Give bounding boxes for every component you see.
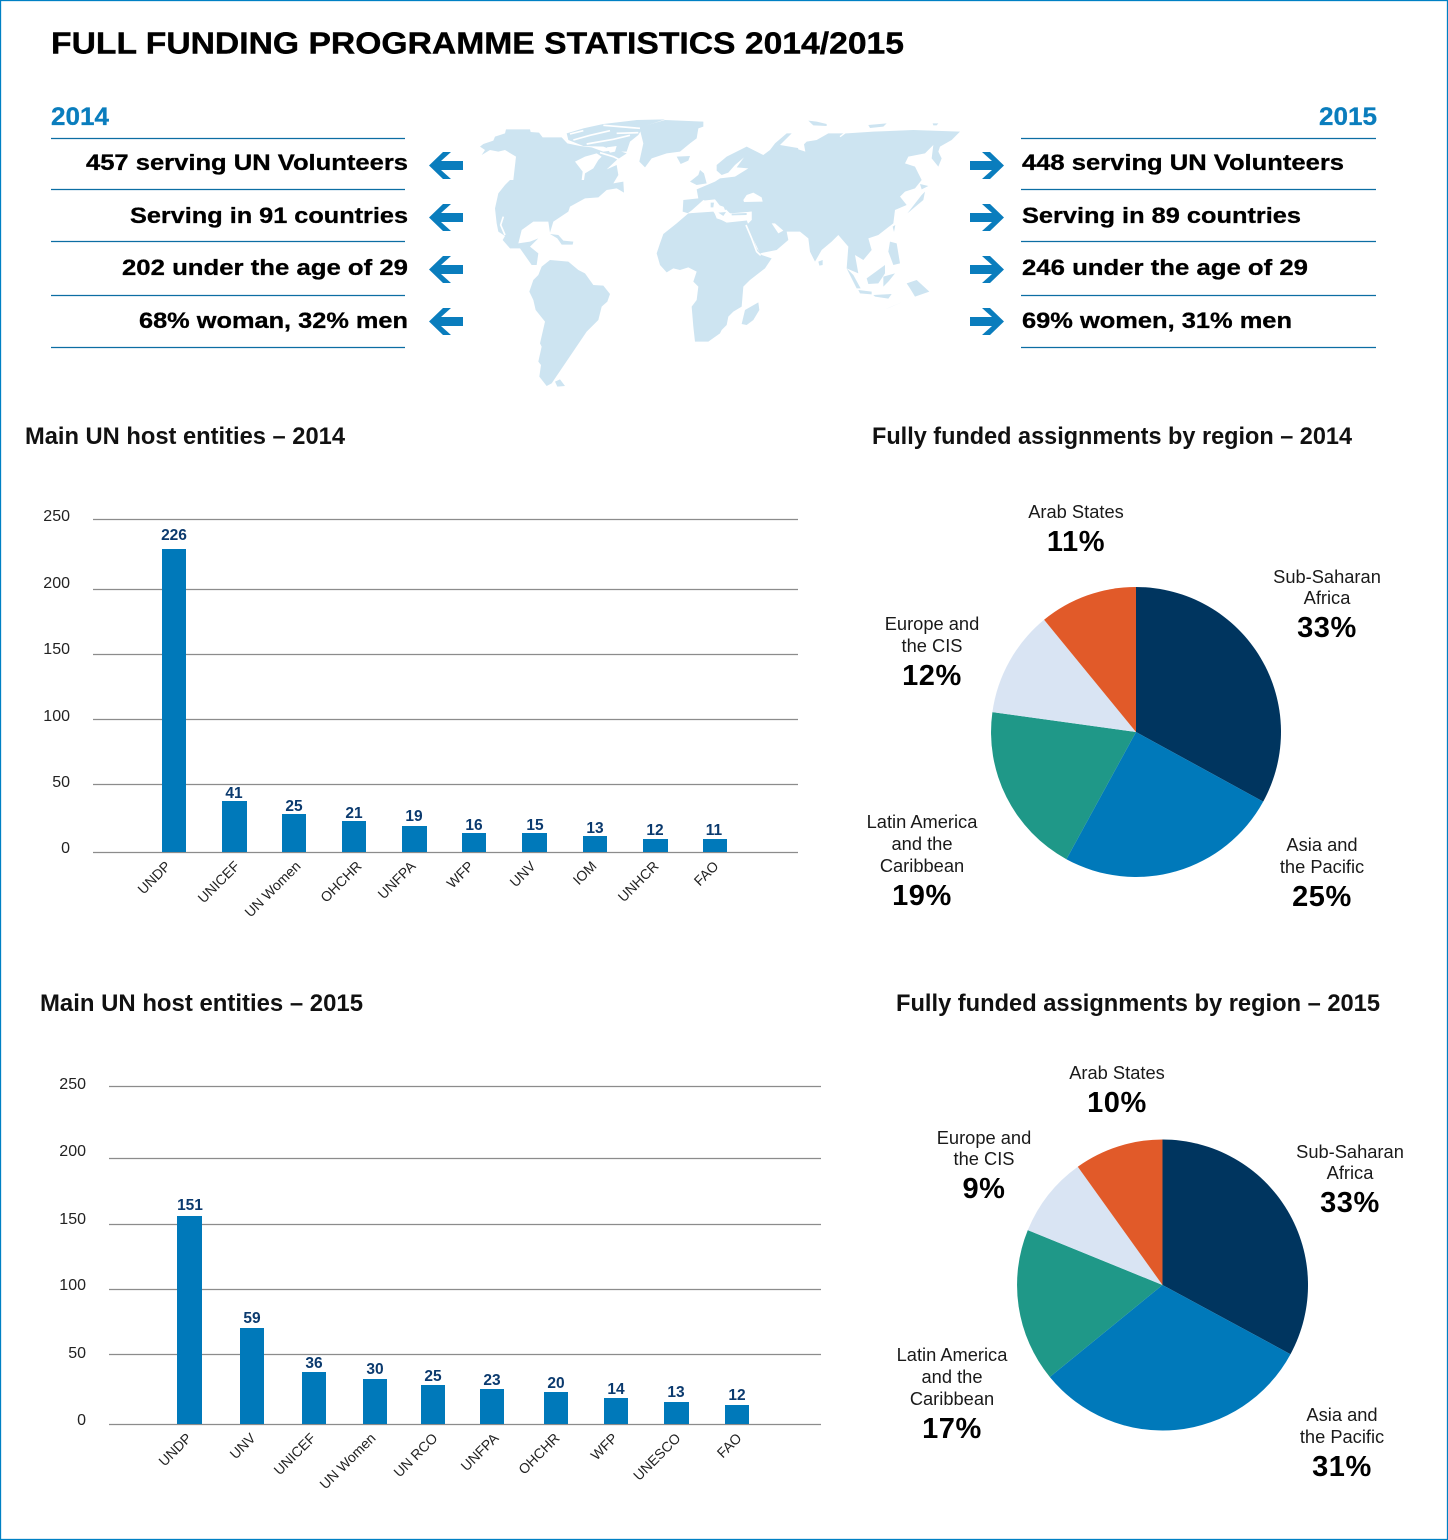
stat rows 2014: Serving in 91 countries <box>130 203 408 228</box>
y axis labels: 150 <box>59 1211 86 1228</box>
label: Arab States: 10% <box>1087 1087 1147 1119</box>
label: Arab States: Arab States <box>1069 1062 1165 1083</box>
value labels: 21 <box>345 805 363 822</box>
value labels: 11 <box>706 822 723 839</box>
category labels: OHCHR <box>317 858 365 905</box>
category labels: WFP <box>587 1430 621 1463</box>
label: Asia and the Pacific: 31% <box>1312 1451 1372 1483</box>
bars <box>162 549 727 852</box>
label: Arab States <box>1028 501 1124 558</box>
label: Latin America and the Caribbean <box>867 811 978 912</box>
arrows pointing right <box>970 152 1004 335</box>
stat rows 2015: 448 serving UN Volunteers <box>1022 150 1344 175</box>
stat rows 2015 <box>1022 150 1344 333</box>
value labels <box>161 527 723 839</box>
title: FULL FUNDING PROGRAMME STATISTICS 2014/2015 <box>51 26 904 60</box>
y axis labels: 200 <box>43 575 70 592</box>
value labels: 226 <box>161 527 187 544</box>
category labels: WFP <box>443 858 477 891</box>
y axis labels: 150 <box>43 641 70 658</box>
stat rows 2014: 68% woman, 32% men <box>139 308 408 333</box>
value labels <box>177 1197 746 1404</box>
heading: 2014: 2014 <box>51 103 109 131</box>
pie slices <box>991 587 1281 877</box>
panel: 2014 key figures <box>51 103 463 348</box>
category labels: FAO <box>690 858 722 889</box>
category labels: UNFPA <box>374 857 419 902</box>
value labels: 41 <box>225 785 243 802</box>
bars <box>177 1216 749 1424</box>
stat rows 2014 <box>86 150 408 333</box>
value labels: 23 <box>483 1372 501 1389</box>
heading: 2015: 2015 <box>1319 103 1377 131</box>
category labels: UN Women <box>241 858 304 920</box>
label: Asia and the Pacific: the Pacific <box>1300 1426 1384 1447</box>
label: Latin America and the Caribbean <box>897 1344 1008 1445</box>
label: Latin America and the Caribbean: and the <box>922 1366 982 1387</box>
category labels: UNDP <box>134 858 174 897</box>
stat rows 2014: 202 under the age of 29 <box>122 255 408 280</box>
label: Sub-Saharan Africa: Africa <box>1304 587 1351 608</box>
panel: 2015 key figures <box>970 103 1377 348</box>
label: Latin America and the Caribbean: Latin America <box>867 811 978 832</box>
value labels: 16 <box>465 817 483 834</box>
category labels <box>155 1429 745 1492</box>
label: Arab States <box>1069 1062 1165 1119</box>
value labels: 19 <box>405 808 423 825</box>
heading: Main UN host entities – 2014 <box>25 423 346 450</box>
value labels: 20 <box>547 1375 565 1392</box>
category labels: OHCHR <box>515 1430 563 1477</box>
label: Europe and the CIS: Europe and <box>937 1127 1031 1148</box>
y axis labels <box>59 1076 86 1429</box>
label: Sub-Saharan Africa: Sub-Saharan <box>1296 1141 1404 1162</box>
y axis labels: 250 <box>43 508 70 525</box>
heading: Main UN host entities – 2015 <box>40 990 363 1017</box>
category labels: UN Women <box>316 1430 379 1492</box>
stat rows 2014: 457 serving UN Volunteers <box>86 150 408 175</box>
label: Latin America and the Caribbean: 19% <box>892 880 952 912</box>
value labels: 25 <box>424 1368 442 1385</box>
label: Europe and the CIS: 12% <box>902 660 962 692</box>
pie slices <box>1017 1140 1308 1430</box>
label: Europe and the CIS: Europe and <box>885 613 979 634</box>
stat rows 2015: 69% women, 31% men <box>1022 308 1292 333</box>
value labels: 13 <box>586 820 604 837</box>
value labels: 13 <box>667 1384 685 1401</box>
label: Europe and the CIS: the CIS <box>902 635 962 656</box>
value labels: 15 <box>526 817 544 834</box>
y axis labels: 0 <box>77 1412 86 1429</box>
label: Asia and the Pacific: 25% <box>1292 881 1352 913</box>
pie chart: assignments by region 2015 <box>896 990 1404 1483</box>
value labels: 12 <box>646 822 664 839</box>
category labels: UNV <box>226 1429 259 1462</box>
heading: Fully funded assignments by region – 2014 <box>872 423 1353 450</box>
label: Latin America and the Caribbean: Caribbean <box>910 1388 994 1409</box>
label: Sub-Saharan Africa <box>1273 566 1381 644</box>
y axis labels: 0 <box>61 840 70 857</box>
label: Asia and the Pacific <box>1280 834 1364 913</box>
label: Sub-Saharan Africa: 33% <box>1320 1187 1380 1219</box>
y axis labels <box>43 508 70 857</box>
world map <box>480 119 960 387</box>
value labels: 25 <box>285 798 303 815</box>
y axis labels: 50 <box>52 774 70 791</box>
label: Arab States: 11% <box>1047 526 1105 558</box>
bar chart: Main UN host entities 2015 <box>40 990 821 1492</box>
label: Europe and the CIS: 9% <box>962 1173 1006 1205</box>
y axis labels: 250 <box>59 1076 86 1093</box>
label: Asia and the Pacific <box>1300 1404 1384 1483</box>
label: Latin America and the Caribbean: Caribbean <box>880 855 964 876</box>
category labels: UNICEF <box>194 858 243 906</box>
category labels: UN RCO <box>390 1430 441 1480</box>
category labels: UNHCR <box>615 858 662 905</box>
value labels: 151 <box>177 1197 203 1214</box>
stat rows 2015: 246 under the age of 29 <box>1022 255 1308 280</box>
label: Arab States: Arab States <box>1028 501 1124 522</box>
value labels: 30 <box>366 1361 384 1378</box>
y axis labels: 200 <box>59 1143 86 1160</box>
value labels: 59 <box>243 1310 261 1327</box>
label: Europe and the CIS <box>885 613 979 692</box>
label: Sub-Saharan Africa <box>1296 1141 1404 1219</box>
label: Europe and the CIS <box>937 1127 1031 1205</box>
heading: Fully funded assignments by region – 2015 <box>896 990 1380 1017</box>
category labels: UNICEF <box>270 1430 319 1478</box>
arrows pointing left <box>429 152 463 335</box>
y axis labels: 100 <box>59 1277 86 1294</box>
label: Asia and the Pacific: the Pacific <box>1280 856 1364 877</box>
label: Europe and the CIS: the CIS <box>954 1148 1014 1169</box>
label: Latin America and the Caribbean: 17% <box>922 1413 982 1445</box>
value labels: 12 <box>728 1387 746 1404</box>
label: Asia and the Pacific: Asia and <box>1286 834 1358 855</box>
category labels: IOM <box>570 858 600 888</box>
category labels: UNDP <box>155 1430 195 1469</box>
bar chart: Main UN host entities 2014 <box>25 423 798 920</box>
label: Sub-Saharan Africa: 33% <box>1297 612 1357 644</box>
label: Latin America and the Caribbean: and the <box>892 833 952 854</box>
stat rows 2015: Serving in 89 countries <box>1022 203 1301 228</box>
category labels: UNV <box>506 857 539 890</box>
y axis labels: 100 <box>43 708 70 725</box>
label: Sub-Saharan Africa: Africa <box>1327 1162 1374 1183</box>
value labels: 36 <box>305 1355 323 1372</box>
category labels: UNFPA <box>457 1429 502 1474</box>
label: Sub-Saharan Africa: Sub-Saharan <box>1273 566 1381 587</box>
pie chart: assignments by region 2014 <box>867 423 1381 913</box>
category labels: UNESCO <box>630 1430 684 1483</box>
value labels: 14 <box>607 1381 625 1398</box>
y axis labels: 50 <box>68 1345 86 1362</box>
category labels <box>134 857 722 920</box>
category labels: FAO <box>713 1430 745 1461</box>
label: Latin America and the Caribbean: Latin America <box>897 1344 1008 1365</box>
label: Asia and the Pacific: Asia and <box>1306 1404 1378 1425</box>
